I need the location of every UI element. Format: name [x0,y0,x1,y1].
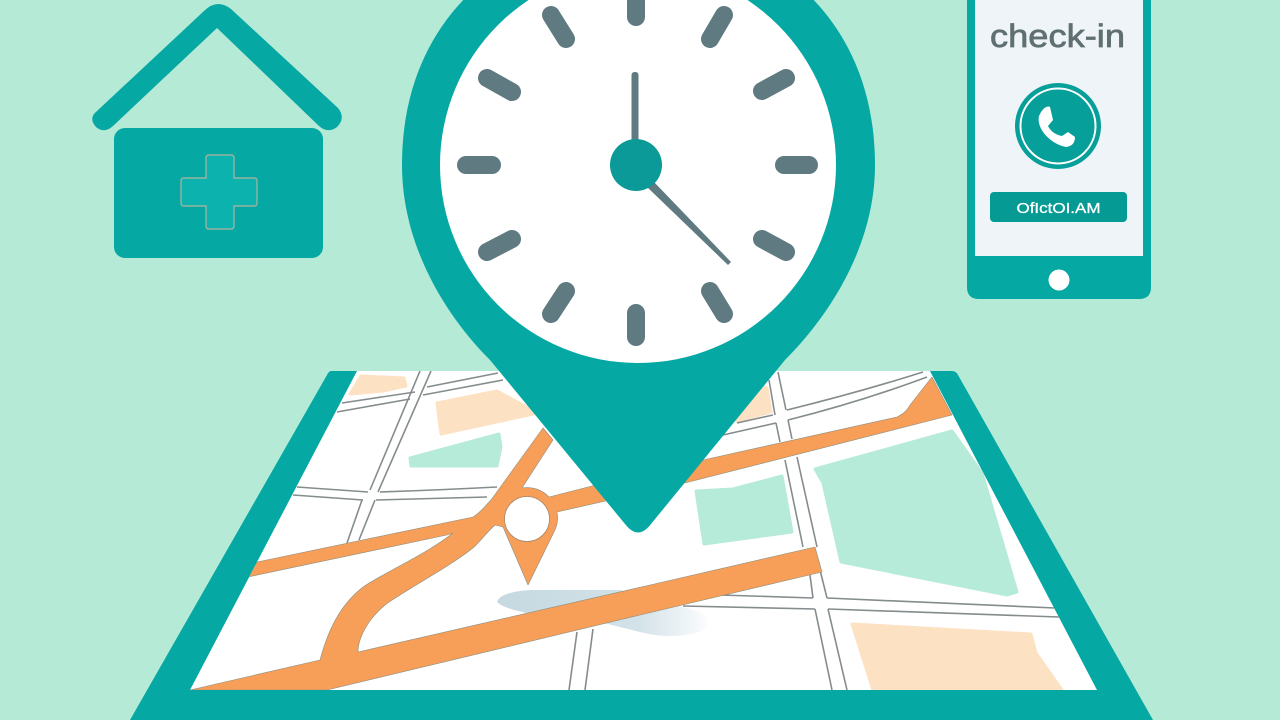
time button [990,192,1127,222]
pin shadow [497,590,708,636]
phone screen [975,0,1143,256]
clock hub [610,139,662,191]
icon: call button [1015,83,1101,169]
orange roads with location pin [190,377,952,690]
medical cross [181,155,257,229]
clock face [440,0,836,363]
check-in heading: check-in [990,18,1125,54]
roof [92,4,342,130]
home button [1048,270,1070,290]
map [130,371,1153,720]
small pin hole [504,496,550,542]
hour ticks [466,0,809,337]
clock hands [632,72,731,265]
phone [967,0,1151,299]
map contents [190,371,1062,690]
building [114,128,323,258]
location pin with clock [402,0,875,532]
green blocks [410,431,1017,595]
street lines [293,371,1059,690]
icon: clinic house [92,4,342,258]
map sheet [190,371,1097,690]
peach blocks [350,376,1062,690]
phone body [967,0,1151,299]
button label: OfIctOI.AM [1016,200,1100,217]
handset [1039,107,1075,147]
map frame [130,371,1153,720]
pin body [402,0,875,532]
